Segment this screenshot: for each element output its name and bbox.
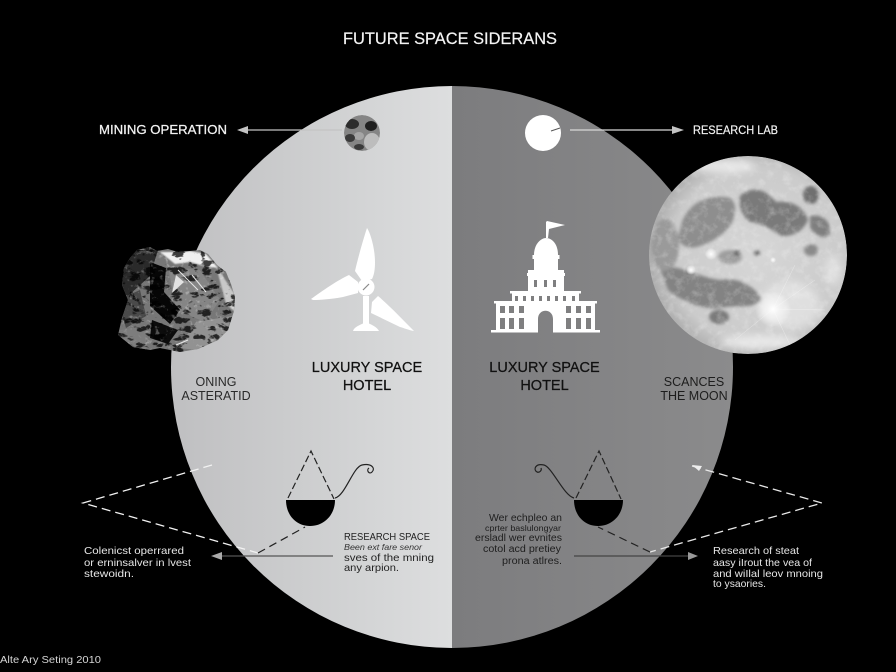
text: right centre block: cprter baslulongyar bbox=[485, 523, 561, 533]
text: research space: Been ext fare senor bbox=[344, 543, 422, 552]
icon: white disc bbox=[525, 115, 561, 151]
text: research space: sves of the mning bbox=[344, 552, 434, 564]
text: right callout: and wiIlal leov mnoing bbox=[713, 568, 823, 580]
label: scances the moon: SCANCES bbox=[664, 375, 724, 389]
panel: left half bbox=[171, 86, 452, 648]
text: right centre block: prona atlres. bbox=[502, 556, 562, 567]
text: right callout bbox=[713, 545, 823, 590]
label: research lab: RESEARCH LAB bbox=[693, 123, 778, 137]
text: left callout bbox=[84, 545, 191, 580]
callout lines left bbox=[83, 465, 333, 560]
icon: full moon bbox=[649, 156, 847, 354]
callout lines right bbox=[574, 465, 822, 560]
text: right centre block: cotol acd pretiey bbox=[483, 544, 561, 555]
arrow: to mining operation bbox=[237, 126, 342, 134]
text: right centre block bbox=[475, 512, 562, 567]
text: research space: RESEARCH SPACE bbox=[344, 531, 430, 543]
label: scances the moon: THE MOON bbox=[660, 389, 728, 403]
panel: central circle bbox=[171, 86, 733, 648]
arrow: to research lab bbox=[570, 126, 684, 134]
label: luxury space hotel right: HOTEL bbox=[520, 378, 569, 394]
icon: small moon bbox=[344, 115, 380, 151]
text: right callout: Research of steat bbox=[713, 545, 799, 557]
text: left callout: Colenicst operrared bbox=[84, 545, 184, 557]
label: luxury space hotel left: LUXURY SPACE bbox=[312, 360, 423, 376]
icon: asteroid bbox=[118, 247, 235, 352]
icon: wind turbine bbox=[311, 228, 414, 331]
icon: right balance bowl bbox=[535, 451, 623, 526]
text: right centre block: ersladl wer evnites bbox=[475, 533, 562, 544]
text: right centre block: Wer echpleo an bbox=[489, 512, 562, 524]
label: oning asteratid: ASTERATID bbox=[181, 389, 251, 403]
label: luxury space hotel left: HOTEL bbox=[343, 378, 391, 394]
text: left callout: stewoidn. bbox=[84, 568, 134, 580]
label: luxury space hotel right: LUXURY SPACE bbox=[489, 360, 600, 376]
label: mining operation: MINING OPERATION bbox=[99, 123, 227, 137]
text: research space bbox=[344, 531, 434, 574]
footer credit: Alte Ary Seting 2010 bbox=[0, 654, 101, 666]
text: right callout: to ysaories. bbox=[713, 578, 766, 590]
icon: domed building bbox=[491, 221, 600, 332]
text: right callout: aasy iIrout the vea of bbox=[713, 557, 812, 569]
text: research space: any arpion. bbox=[344, 562, 399, 574]
title: FUTURE SPACE SIDERANS bbox=[343, 30, 557, 48]
panel: right half bbox=[452, 86, 733, 648]
text: left callout: or erninsalver in lvest bbox=[84, 557, 191, 569]
icon: left balance bowl bbox=[286, 451, 373, 526]
label: oning asteratid: ONING bbox=[196, 375, 236, 389]
